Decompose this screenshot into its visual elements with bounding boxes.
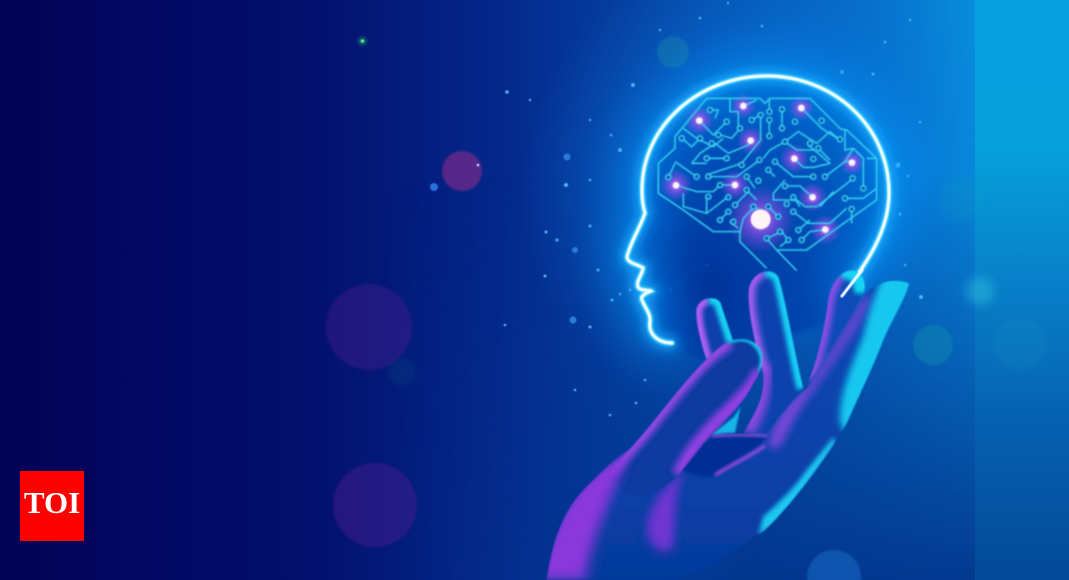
palm hollow [682, 435, 767, 477]
lower edge light [758, 437, 835, 535]
middle finger [743, 270, 804, 435]
hand [546, 270, 910, 580]
brain circuit [658, 93, 877, 271]
glowing nodes [673, 103, 855, 233]
ring finger [808, 270, 866, 383]
little finger [695, 297, 734, 360]
TOI logo: TOI [24, 485, 80, 520]
gap sliver [712, 407, 741, 435]
head silhouette with neon outline [627, 76, 889, 360]
long finger purple [768, 293, 870, 449]
palm [586, 280, 910, 580]
bokeh circles [326, 36, 1046, 580]
TOI logo [20, 471, 84, 541]
circuit terminals [666, 107, 866, 243]
purple node glows [660, 93, 865, 253]
index finger [610, 338, 764, 492]
star particles [358, 2, 923, 416]
long finger cyan [834, 280, 910, 433]
head outline tip over finger [842, 270, 862, 296]
circuit traces [658, 98, 877, 271]
thumb purple edge [647, 473, 683, 551]
wrist purple shading [530, 447, 627, 580]
